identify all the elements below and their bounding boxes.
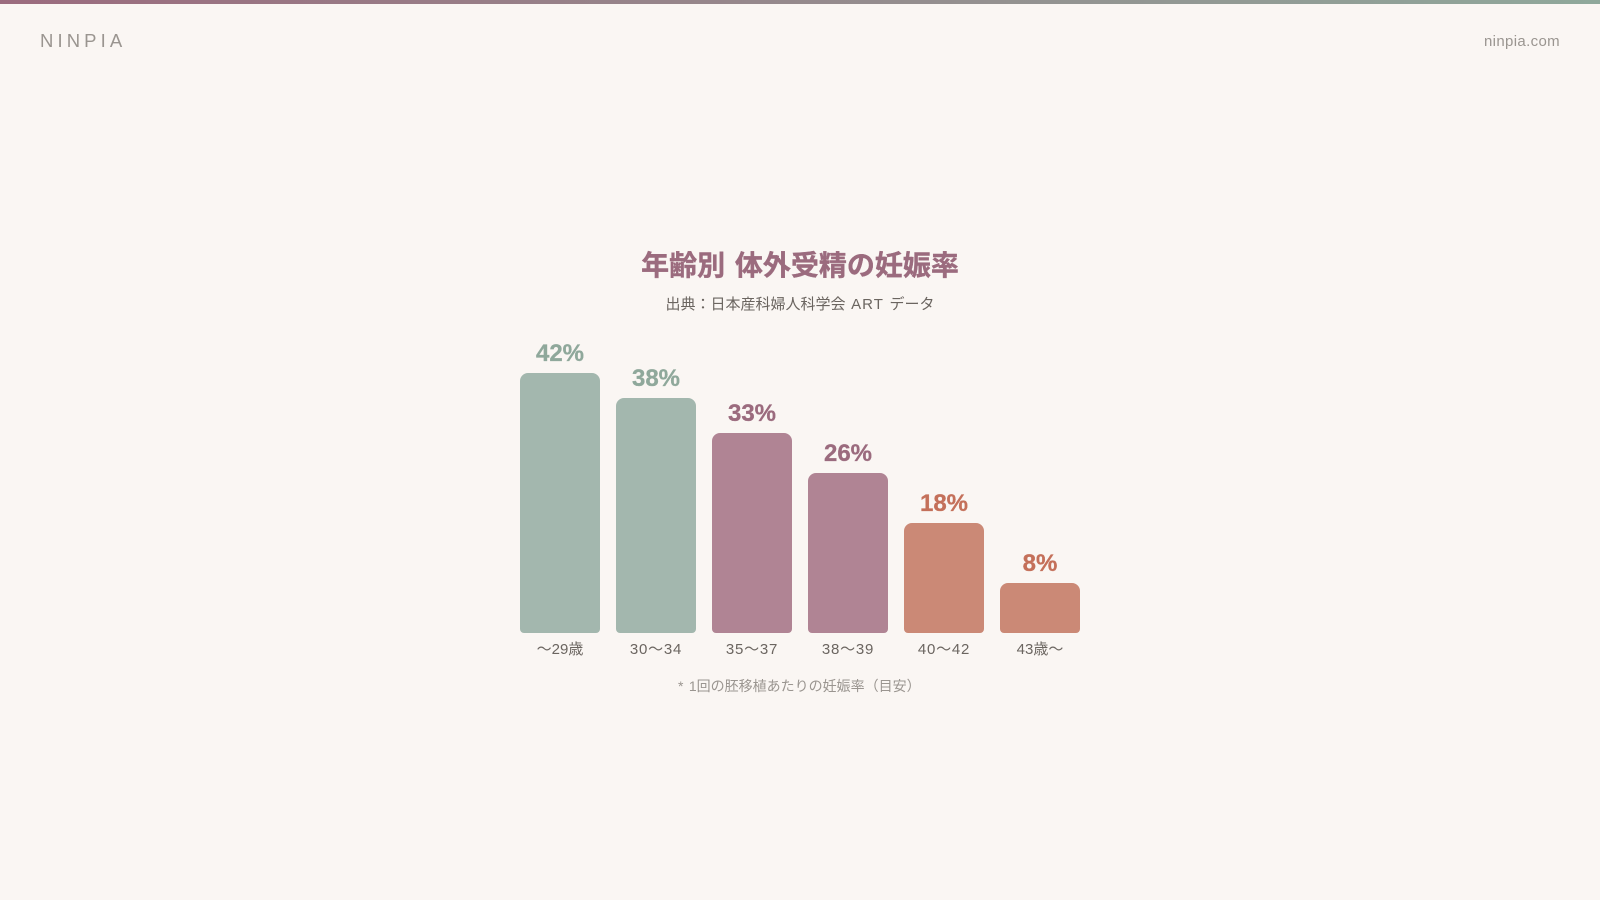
bar: 43 and over (1000, 550, 1080, 633)
axis label: 35 to 37: 35〜37 (726, 641, 778, 658)
bar: 30 to 34: 38% (632, 364, 680, 392)
bar: up to 29 (520, 340, 600, 633)
top gradient bar (0, 0, 1600, 4)
axis label: 43 and over: 43歳〜 (1017, 641, 1063, 658)
axis label: 38 to 39: 38〜39 (822, 641, 874, 658)
bar: 38 to 39 (808, 440, 888, 633)
bar: 43 and over: 8% (1023, 550, 1057, 576)
source subtitle: 出典：日本産科婦人科学会 ART データ (665, 296, 935, 313)
axis label: 30 to 34: 30〜34 (630, 641, 682, 658)
brand logo: NINPIA (40, 30, 126, 51)
bar: 35 to 37 (712, 400, 792, 633)
bar: 30 to 34 (616, 364, 696, 633)
bar chart (520, 340, 1080, 633)
bar: 40 to 42: 18% (920, 490, 968, 516)
axis label: up to 29: 〜29歳 (537, 641, 583, 658)
bar: 40 to 42 (904, 490, 984, 633)
footnote: * 1回の胚移植あたりの妊娠率（目安） (678, 678, 921, 694)
bar: 38 to 39: 26% (824, 440, 872, 466)
site url: ninpia.com (1484, 32, 1560, 50)
axis label: 40 to 42: 40〜42 (918, 641, 970, 658)
title: 年齢別 体外受精の妊娠率 (641, 250, 959, 281)
bar: up to 29: 42% (536, 340, 584, 366)
bar: 35 to 37: 33% (728, 400, 776, 426)
